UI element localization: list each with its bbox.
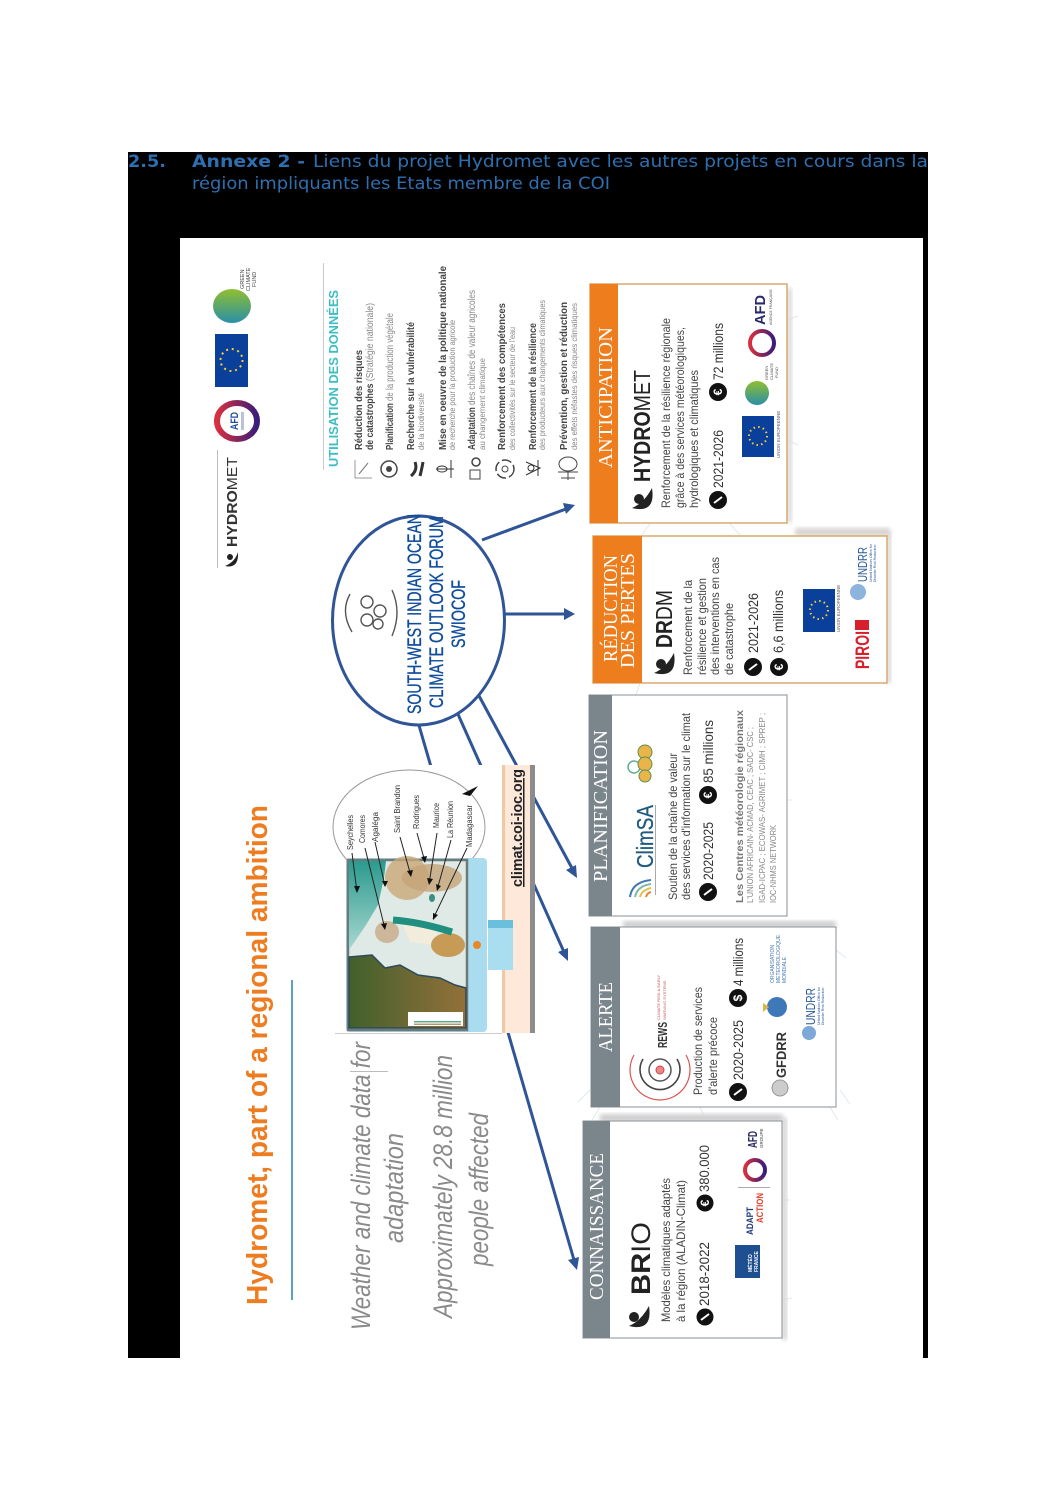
panel: planification [589, 695, 787, 916]
heading: utilisation des données: UTILISATION DES DONNÉES [326, 290, 341, 467]
logo: climsa [630, 804, 658, 897]
data uses list [323, 263, 579, 480]
item: prévention: des effets néfastes des risques climatiques [570, 303, 579, 450]
logo: crews: WARNING SYSTEMS [662, 980, 667, 1020]
section heading: Annexe 2 - [192, 152, 305, 172]
period: 2020-2025 [700, 822, 716, 880]
item: réduction des risques: de catastrophes (Stratégie nationale) [364, 303, 376, 450]
partner logos: AGENCE FRANÇAISE [769, 289, 773, 325]
budget: € [711, 388, 725, 395]
regional centres: IGAD-ICPAC ; ECOWAS- AGRIMET ; CIMH ; SPREP ; [758, 713, 767, 903]
panel: réduction des pertes: RÉDUCTION [599, 555, 622, 662]
description: de catastrophe [722, 603, 736, 675]
description: Modèles climatiques adaptés [659, 1178, 673, 1322]
logo: drdm [651, 590, 677, 674]
regional centres: IOC-NHMS NETWORK [769, 824, 778, 903]
description: à la région (ALADIN-Climat) [674, 1180, 688, 1322]
item: politique nationale: Mise en oeuvre de la politique nationale [437, 266, 449, 450]
description: grâce à des services météorologiques, [673, 327, 687, 508]
panel: connaissance: CONNAISSANCE [586, 1153, 608, 1300]
subtitle: people affected: people affected [464, 1112, 494, 1267]
regional centres: L'UNION AFRICAIN- ACMAD, CEAC ; SADC- CSC ; [746, 727, 755, 903]
budget [709, 323, 727, 401]
description: des interventions en cas [708, 557, 722, 675]
panel: planification: PLANIFICATION [590, 730, 612, 882]
period [744, 593, 762, 676]
subtitle: people affected: Approximately 28.8 million [428, 1055, 458, 1320]
island labels: Madagascar [465, 805, 474, 847]
period: 2021-2026 [745, 593, 761, 653]
budget [696, 1145, 714, 1212]
partner logos [803, 543, 877, 669]
island labels: Saint Brandon [393, 785, 402, 833]
panel: réduction des pertes: DES PERTES [617, 553, 639, 668]
island labels [346, 785, 474, 850]
partner logos [735, 1128, 770, 1278]
subtitle: weather and climate data: Weather and climate data for [346, 1041, 376, 1330]
island labels: Agaléga [371, 811, 380, 842]
partner logos: UNDRR [803, 988, 818, 1025]
description: Renforcement de la résilience régionale [659, 318, 673, 508]
budget: € [698, 1199, 712, 1206]
top logo: Green Climate Fund: FUND [252, 272, 258, 287]
top logo: AFD: AFD [229, 412, 241, 430]
item: résilience [526, 300, 547, 476]
item: compétences [496, 303, 517, 478]
partner logos: Disaster Risk Reduction [873, 545, 877, 582]
arrow to anticipation [482, 503, 575, 540]
period [699, 822, 717, 901]
panel: climate map portal [333, 765, 535, 1034]
description: Production de services [691, 987, 705, 1095]
island labels: La Réunion [446, 801, 455, 838]
item: recherche: de la biodiversité [417, 392, 426, 450]
period [696, 1242, 714, 1326]
section heading [128, 152, 928, 194]
partner logos: UNION EUROPEENNE [776, 411, 781, 458]
arrow to réduction des pertes [505, 608, 575, 620]
item: planification [381, 313, 397, 477]
top logo: AFD [217, 403, 257, 439]
section heading: 2.5. [128, 152, 166, 172]
item: adaptation [466, 290, 487, 479]
top logo: Green Climate Fund [213, 267, 258, 323]
subtitle: weather and climate data [346, 1041, 409, 1330]
partner logos: FRANCE [754, 1251, 760, 1272]
partner logos: AFD [752, 295, 769, 325]
partner logos: UNION EUROPEENNE [836, 585, 841, 632]
description: d'alerte précoce [706, 1017, 720, 1095]
panel: anticipation: ANTICIPATION [595, 327, 617, 468]
subtitle: weather and climate data: adaptation [379, 1133, 409, 1243]
arrow to connaissance [418, 722, 579, 1270]
icon: forum [345, 590, 397, 636]
section heading: région impliquants les Etats membre de la COI [192, 174, 610, 194]
island labels: Rodrigues [412, 795, 421, 829]
item: adaptation: au changement climatique [478, 357, 487, 450]
budget: 85 millions [700, 720, 716, 783]
white infographic panel [180, 238, 923, 1358]
partner logos [763, 934, 825, 1096]
arrow to planification [478, 694, 577, 878]
description: Soutien de la chaîne de valeur [666, 753, 680, 900]
item: recherche: Recherche sur la vulnérabilité [405, 322, 417, 450]
period: 2021-2026 [710, 430, 726, 488]
partner logos: GREEN [764, 366, 769, 380]
partner logos: FUND [774, 367, 779, 378]
partner logos: UNDRR [855, 547, 870, 582]
logo: crews [630, 974, 690, 1100]
partner logos: United Nations Office for [817, 986, 821, 1025]
partner logos: United Nations Office for [869, 543, 873, 582]
forum name: CLIMATE OUTLOOK FORUM [427, 516, 448, 708]
partner logos [742, 289, 781, 458]
description [681, 557, 736, 675]
peach footer strip [502, 765, 530, 1033]
panel: alerte: ALERTE [595, 982, 617, 1052]
description [691, 987, 720, 1095]
partner logos: ACTION [755, 1193, 765, 1223]
top logo: European Union flag [215, 334, 248, 387]
title: Hydromet, part of a regional ambition [242, 805, 274, 1305]
panel: alerte [591, 921, 836, 1107]
partner logos: MÉTÉO [746, 1254, 754, 1272]
item: réduction des risques [353, 303, 376, 478]
item: planification: Planification de la production végétale [384, 313, 396, 450]
top logo: Green Climate Fund: GREEN [240, 269, 246, 289]
partner logos: GROUPE [759, 1128, 764, 1148]
partner logos: METEOROLOGIQUE [776, 934, 782, 983]
island labels: Comores [358, 815, 367, 843]
budget: € [772, 663, 786, 670]
budget: 6,6 millions [770, 590, 786, 653]
budget: 380.000 [696, 1145, 712, 1192]
period [729, 1020, 747, 1101]
map arrows [352, 786, 478, 930]
period [709, 430, 727, 509]
item: réduction des risques: Réduction des risques [353, 350, 365, 450]
island labels: Seychelles [346, 815, 355, 850]
panel: anticipation [590, 284, 792, 523]
budget: € [701, 791, 715, 798]
screen frame [346, 858, 487, 1032]
partner logos: AFD [745, 1131, 760, 1148]
item: résilience: des producteurs aux changements climatiques [538, 300, 547, 450]
island labels: Maurice [432, 803, 441, 828]
logo: climsa: ClimSA [632, 804, 658, 868]
url: climat.coi-ioc.org [509, 769, 526, 887]
screen stand [488, 920, 513, 970]
partner logos: Disaster Risk Reduction [821, 988, 825, 1025]
description: Renforcement de la [681, 580, 695, 675]
logo: partner [628, 745, 652, 782]
budget: 4 millions [730, 938, 746, 986]
item: adaptation: Adaptation des chaînes de valeur agricoles [466, 290, 478, 450]
item: politique nationale: de recherche pour la production agricole [448, 320, 457, 450]
logo: brio: BRIO [626, 1222, 656, 1295]
SWIOCOF circle [332, 514, 504, 725]
logo: hydromet: HYDROMET [629, 370, 655, 482]
item: politique nationale [436, 266, 457, 478]
item: prévention [558, 302, 579, 480]
logo: brio [626, 1222, 656, 1327]
description: des services d'information sur le climat [679, 712, 693, 900]
partner logos: ORGANISATION [770, 945, 776, 983]
description: résilience et gestion [695, 578, 709, 675]
partner logos: ADAPT [745, 1207, 755, 1235]
description: hydrologiques et climatiques [687, 370, 701, 508]
subtitle: people affected [428, 1055, 494, 1320]
budget: $ [731, 994, 745, 1001]
partner logos: GFDRR [773, 1032, 789, 1078]
forum name: SWIOCOF [449, 580, 470, 648]
forum name [405, 514, 470, 714]
top logo: Hydromet: HYDROMET [224, 457, 241, 547]
budget [729, 938, 747, 1007]
budget [699, 720, 717, 804]
partner logos: PIROI [853, 631, 874, 669]
item: compétences: des collectivités sur le secteur de l'eau [508, 327, 517, 450]
regional centres [734, 710, 778, 903]
title rule [291, 980, 293, 1300]
black page block [128, 152, 928, 1358]
item: compétences: Renforcement des compétences [496, 303, 508, 450]
logo: crews: CLIMATE RISK & EARLY [656, 974, 661, 1020]
forum name: SOUTH-WEST INDIAN OCEAN [405, 514, 426, 714]
locator ellipse [333, 770, 485, 884]
top logo: Hydromet [217, 450, 241, 568]
budget [770, 590, 788, 676]
logo: drdm: DRDM [651, 590, 677, 648]
partner logos: CLIMATE [769, 363, 774, 380]
panel: réduction des pertes [593, 528, 891, 683]
period: 2020-2025 [730, 1020, 746, 1080]
budget: 72 millions [710, 323, 726, 380]
item: prévention: Prévention, gestion et réduction [558, 302, 570, 450]
map [348, 856, 467, 1030]
item: résilience: Renforcement de la résilience [527, 323, 539, 450]
top logo: Green Climate Fund: CLIMATE [246, 267, 252, 291]
description [659, 318, 701, 508]
arrow to alerte [457, 712, 568, 961]
description [659, 1178, 688, 1322]
description [666, 712, 693, 900]
logo: crews: REWS [655, 1022, 670, 1048]
panel: connaissance [583, 1114, 787, 1340]
period: 2018-2022 [696, 1242, 712, 1306]
regional centres: Les Centres météorologie régionaux [734, 710, 746, 903]
partner logos: MONDIALE [782, 956, 788, 983]
item: recherche [405, 322, 426, 476]
section heading: Liens du projet Hydromet avec les autres projets en cours dans la [313, 152, 928, 172]
